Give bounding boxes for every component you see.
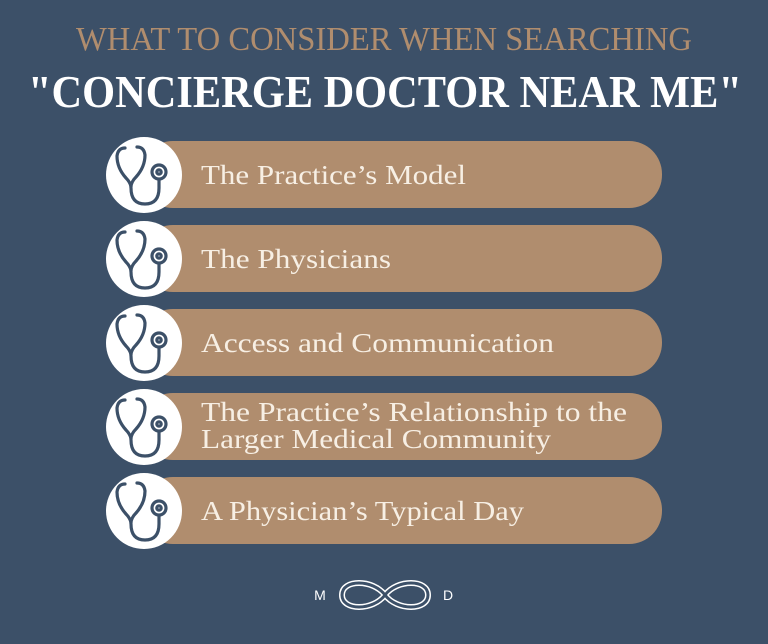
logo bbox=[314, 583, 453, 607]
item 3: Access and Communication bbox=[201, 328, 555, 358]
title line 1: WHAT TO CONSIDER WHEN SEARCHING bbox=[76, 21, 692, 58]
item 3 bbox=[106, 305, 662, 381]
item 4: Larger Medical Community bbox=[201, 424, 552, 454]
logo: M bbox=[314, 587, 326, 603]
item 1 bbox=[106, 137, 662, 213]
item 1: The Practice’s Model bbox=[201, 160, 466, 190]
item 5 bbox=[106, 473, 662, 549]
item 2 bbox=[106, 221, 662, 297]
item 2: The Physicians bbox=[201, 244, 391, 274]
logo: D bbox=[443, 587, 453, 603]
item 5: A Physician’s Typical Day bbox=[201, 496, 525, 526]
item 4 bbox=[106, 389, 662, 465]
item 4: The Practice’s Relationship to the bbox=[201, 397, 627, 427]
